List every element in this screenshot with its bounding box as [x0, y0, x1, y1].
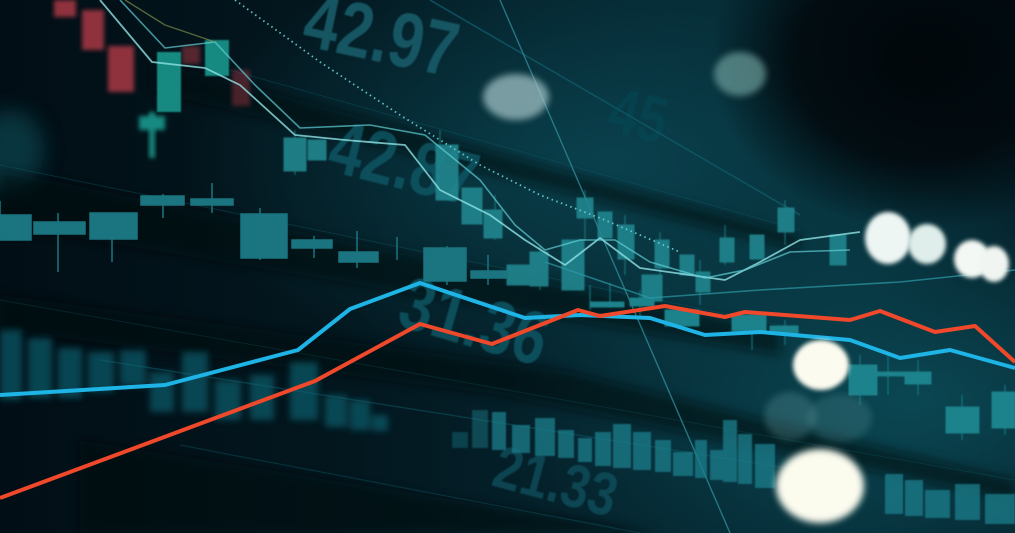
volume bars left: [0, 330, 388, 431]
number: 42.87: 42.87: [321, 106, 487, 222]
candlesticks: mid-left row: [0, 183, 506, 285]
volume bars bottom: [452, 410, 1015, 524]
line: dotted trend: [235, 0, 680, 252]
line: blue indicator: [0, 283, 1015, 395]
line: pale lower trend: [120, 0, 850, 278]
number: 21.33: 21.33: [487, 433, 625, 530]
line: pale upper trend: [100, 0, 860, 280]
red candlesticks: [54, 0, 250, 106]
number: 31.36: 31.36: [390, 261, 558, 382]
green candlesticks top left: [139, 40, 229, 158]
blurred price numbers: [297, 0, 675, 530]
line: red indicator: [0, 306, 1015, 498]
number: 45: 45: [602, 74, 675, 158]
line: long flat trend: [545, 262, 1015, 298]
candlesticks: right: [590, 283, 1015, 440]
thin white-cyan price lines: [100, 0, 1015, 298]
bokeh lights: [483, 52, 1009, 523]
candlesticks: central cluster: [284, 130, 846, 305]
line: olive top left: [125, 0, 215, 42]
